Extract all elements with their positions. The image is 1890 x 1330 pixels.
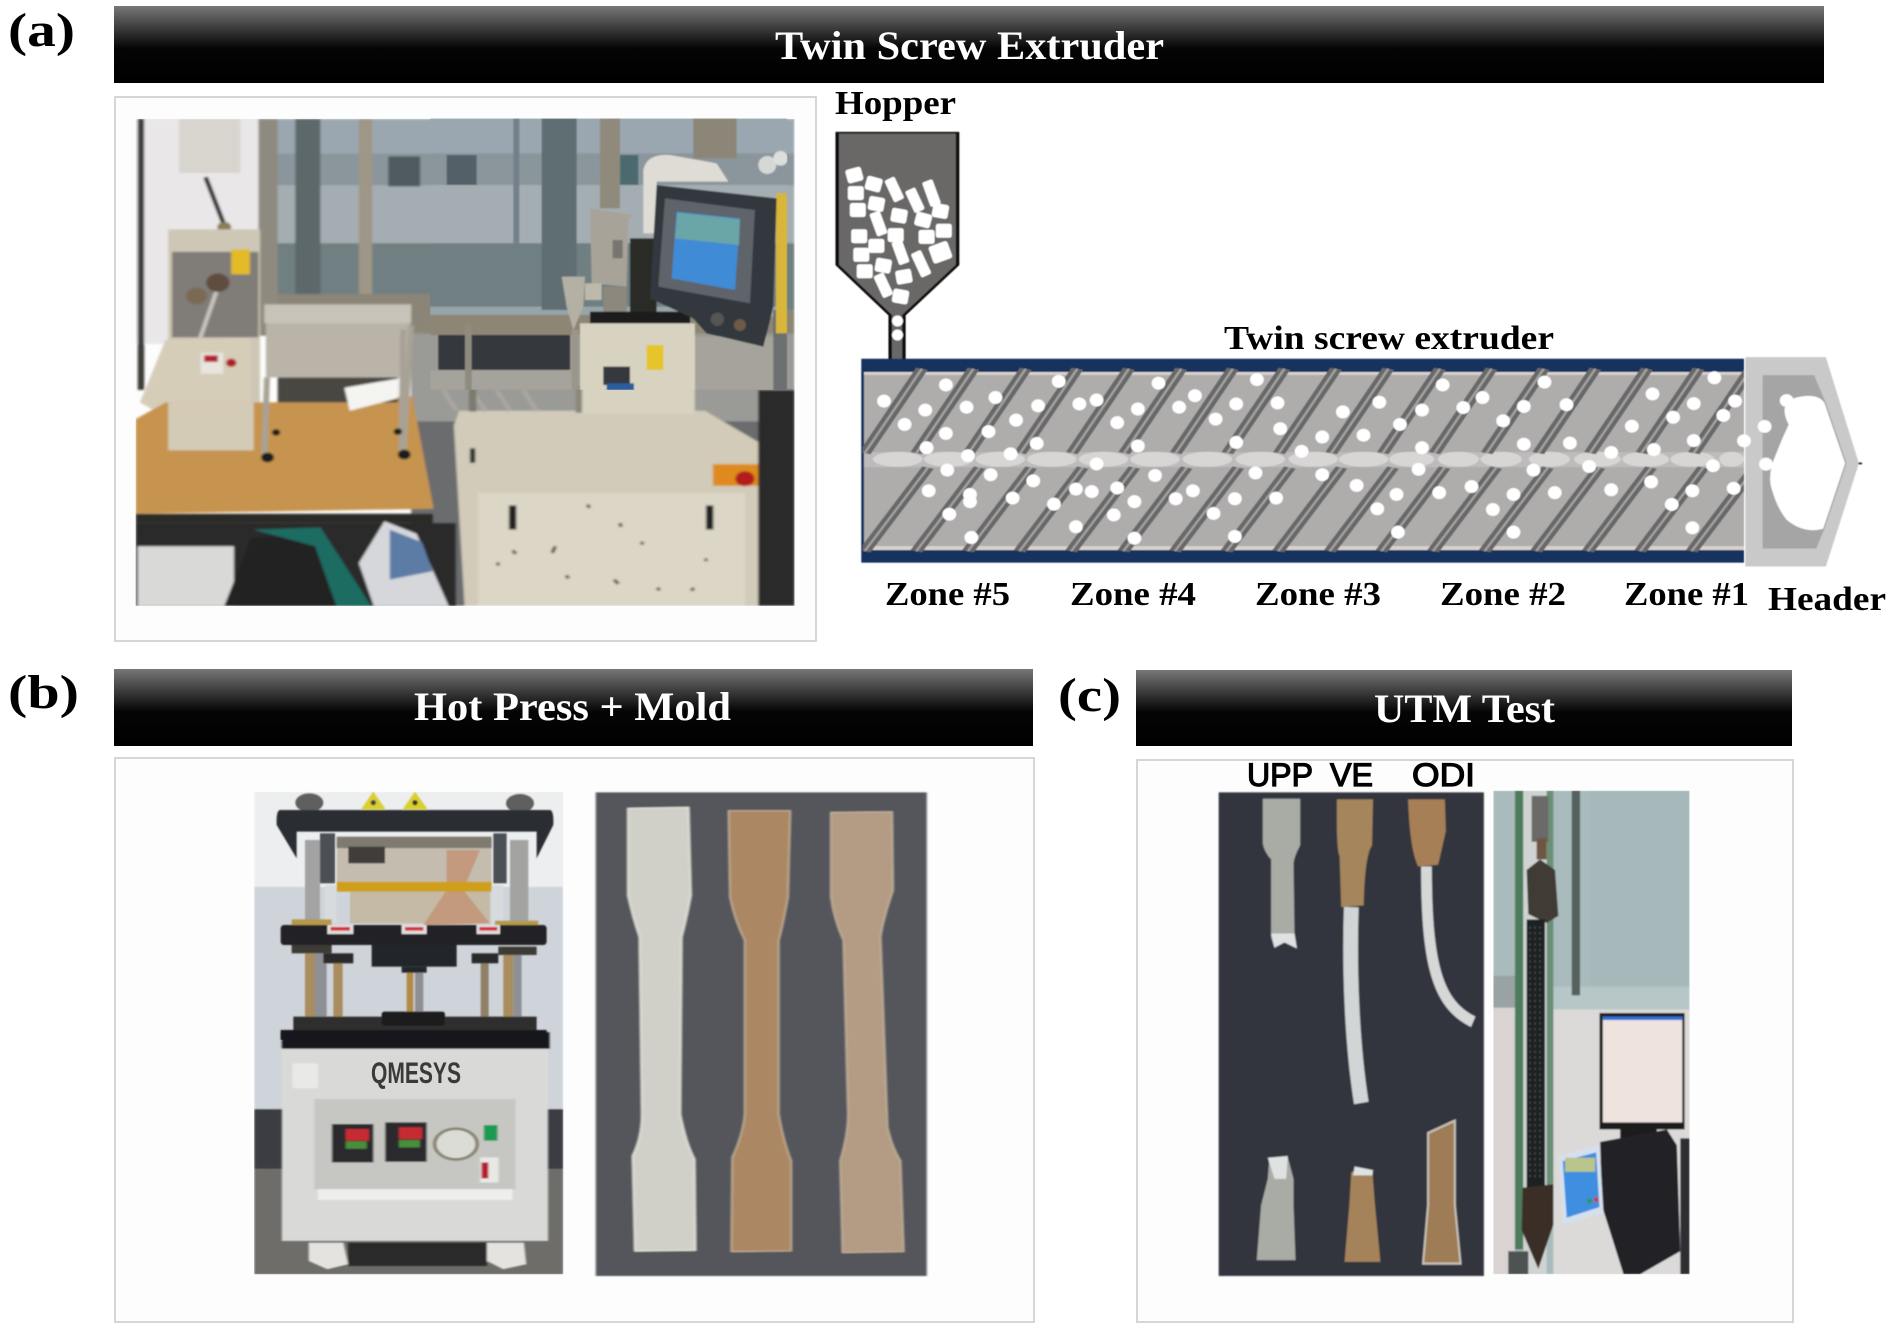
label: Zone #2: Zone #2 xyxy=(1440,576,1566,613)
heading bar: Hot Press + Mold: Hot Press + Mold xyxy=(414,684,731,729)
photo detail: window, hopper and touch screen xyxy=(430,118,788,390)
label: UPP: UPP xyxy=(1247,757,1313,793)
photo: fractured specimens xyxy=(1219,792,1484,1276)
heading bar: Twin Screw Extruder: Twin Screw Extruder xyxy=(775,23,1164,68)
photo: hot press machine xyxy=(254,792,563,1274)
photo: three molded tensile specimens xyxy=(596,792,927,1276)
panel: UTM test xyxy=(1137,757,1793,1322)
barrel with twin screws and pellets xyxy=(861,359,1755,563)
heading bar: Hot Press + Mold xyxy=(114,669,1033,746)
panel: hot press and mold xyxy=(115,758,1034,1322)
label: VE: VE xyxy=(1330,757,1373,793)
photo detail: press frame and platens xyxy=(277,792,553,1040)
panel label (b): (b) xyxy=(8,666,79,719)
heading bar: UTM Test xyxy=(1136,670,1792,746)
label: Zone #4: Zone #4 xyxy=(1070,576,1196,613)
brand label: QMESYS: QMESYS xyxy=(371,1057,461,1090)
photo detail: press cabinet and control panel xyxy=(282,1032,549,1269)
heading bar: UTM Test: UTM Test xyxy=(1374,686,1556,731)
panel label (a): (a) xyxy=(8,4,75,57)
label: ODI: ODI xyxy=(1412,757,1475,793)
panel label (c): (c) xyxy=(1058,669,1121,722)
photo: twin screw extruder line xyxy=(136,118,795,606)
label: Header: Header xyxy=(1768,581,1886,618)
label: Twin screw extruder: Twin screw extruder xyxy=(1224,320,1554,357)
label: Zone #5: Zone #5 xyxy=(885,576,1010,613)
label: Hopper: Hopper xyxy=(835,85,956,122)
label: Zone #1: Zone #1 xyxy=(1624,576,1749,613)
schematic: twin screw extruder process xyxy=(837,133,1862,566)
label: Zone #3: Zone #3 xyxy=(1255,576,1381,613)
panel: extruder photo xyxy=(115,97,816,641)
heading bar: Twin Screw Extruder xyxy=(114,6,1824,83)
icon: hopper with pellets xyxy=(837,133,958,361)
header die at extruder outlet xyxy=(1737,357,1862,566)
photo: universal testing machine with monitor xyxy=(1493,791,1690,1274)
